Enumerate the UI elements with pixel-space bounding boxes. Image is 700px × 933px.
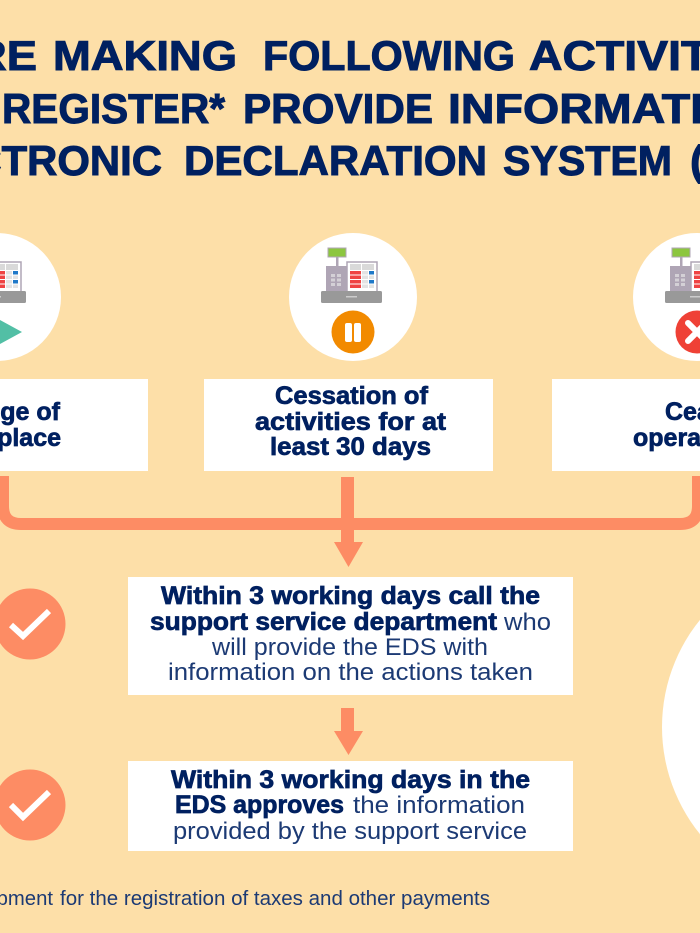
title: PROVIDE [243, 85, 433, 132]
title: DECLARATION [184, 137, 487, 184]
panel: cessation of activities [204, 379, 493, 471]
decorative large circle at right [662, 557, 700, 897]
footnote: for the registration of taxes and other payments [60, 888, 490, 910]
title [0, 32, 700, 184]
title: MAKING [53, 32, 237, 79]
panel: cessation of activities: least 30 days [270, 433, 431, 461]
panel: EDS approval step [128, 761, 573, 851]
icon: check mark 2 [0, 770, 66, 840]
icon: cash register with start symbol [0, 233, 61, 361]
icon: check mark 1 [0, 588, 66, 660]
icon: cash register with cancel symbol [633, 233, 700, 361]
panel: cease operation [552, 379, 700, 471]
panel: support service step: Within 3 working days call the [161, 582, 540, 610]
panel: support service step [128, 577, 573, 695]
arrow: step 1 to step 2 [334, 708, 363, 755]
title: REGISTER* [2, 85, 226, 132]
icon: cash register with pause symbol [289, 233, 417, 361]
panel: cessation of activities: Cessation of [275, 382, 429, 410]
panel: support service step: will provide the EDS with [211, 634, 488, 661]
panel: EDS approval step: provided by the support service [173, 818, 527, 845]
connector arrow: three activities merge [3, 476, 698, 567]
title: FOLLOWING [263, 32, 515, 79]
panel: support service step: information on the actions taken [168, 659, 533, 686]
panel: change of workplace [0, 379, 148, 471]
panel: EDS approval step: Within 3 working days in the [171, 766, 530, 794]
panel: EDS approval step: EDS approves [175, 791, 344, 819]
title: SYSTEM [503, 137, 672, 184]
panel: cessation of activities: activities for at [255, 408, 447, 436]
panel: EDS approval step: the information [353, 792, 525, 819]
panel: support service step: support service department [150, 608, 498, 636]
panel: support service step: who [503, 609, 551, 636]
